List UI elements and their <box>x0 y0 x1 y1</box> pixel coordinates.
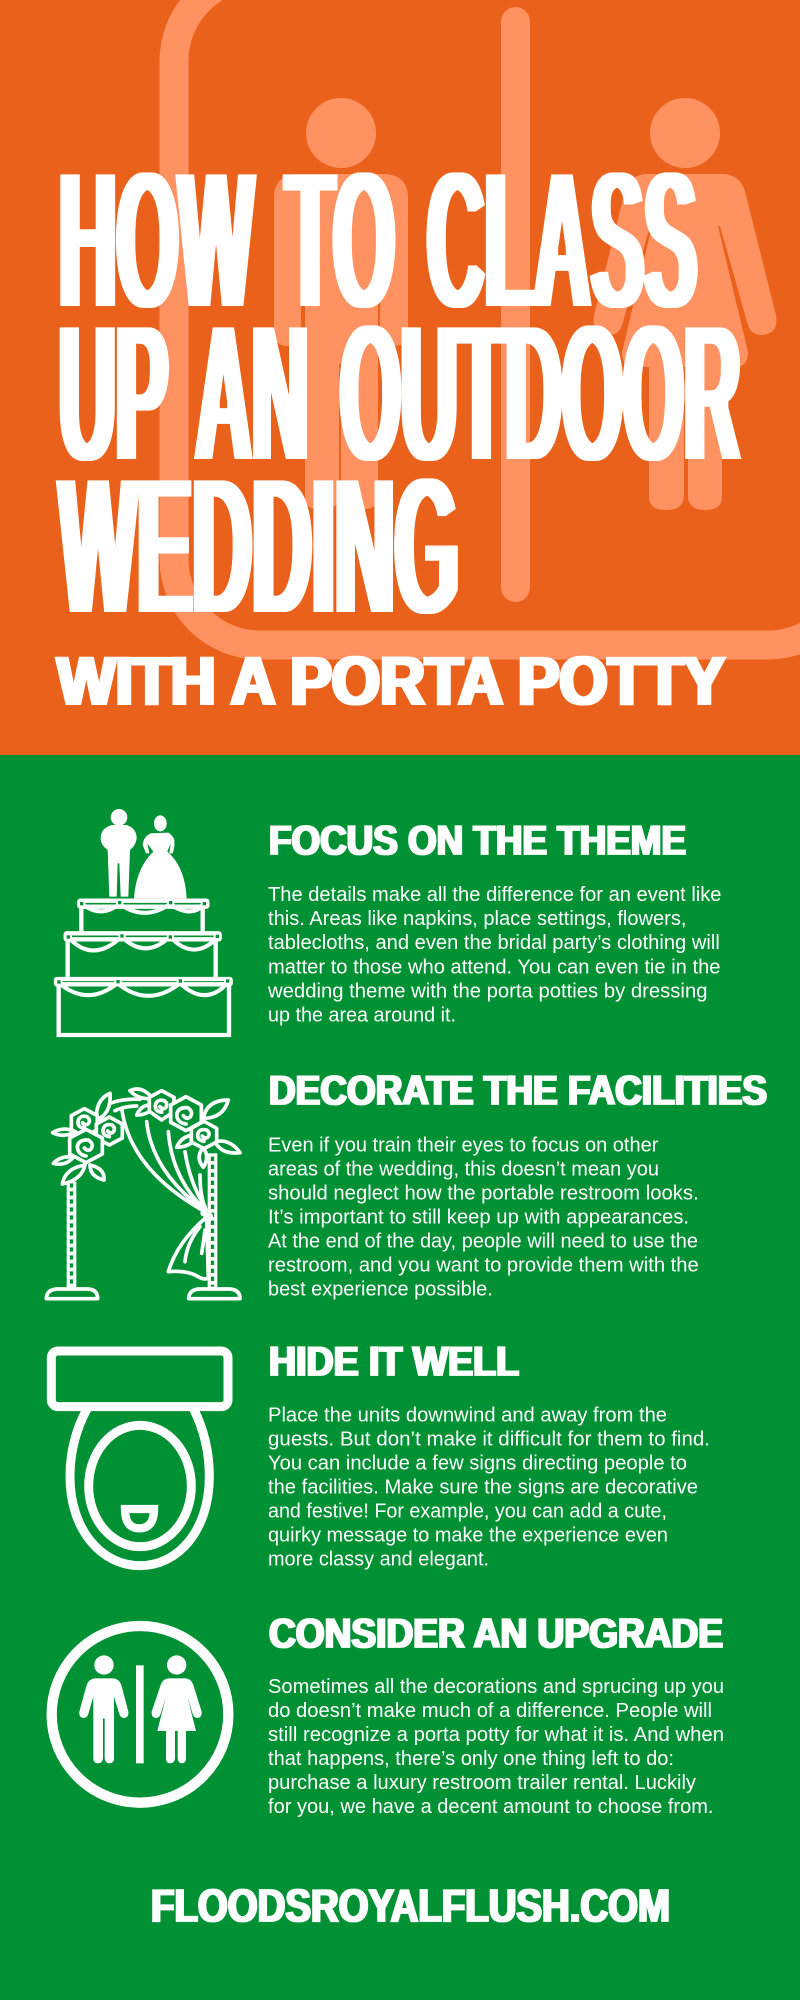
body text <box>268 1134 699 1300</box>
icon: floral wedding arch <box>46 1089 240 1299</box>
body text: wedding theme with the porta potties by dressing <box>267 980 708 1002</box>
body text: areas of the wedding, this doesn’t mean you <box>268 1158 659 1180</box>
icon: restroom sign <box>52 1626 228 1803</box>
heading: HIDE IT WELL <box>269 1338 519 1385</box>
body text: It’s important to still keep up with appearances. <box>268 1206 689 1228</box>
section: hide it well <box>51 1338 710 1570</box>
body text: do doesn’t make much of a difference. People will <box>268 1700 712 1722</box>
body text: purchase a luxury restroom trailer rental. Luckily <box>268 1772 696 1794</box>
panel: green content <box>0 755 800 2000</box>
icon: wedding cake <box>56 809 231 1035</box>
background restroom sign icon <box>174 0 800 645</box>
section: consider an upgrade <box>52 1610 724 1818</box>
body text: Sometimes all the decorations and sprucing up you <box>268 1676 724 1698</box>
body text: more classy and elegant. <box>268 1548 489 1570</box>
body text: matter to those who attend. You can even tie in the <box>268 956 720 978</box>
body text: The details make all the difference for an event like <box>268 884 722 906</box>
body text: restroom, and you want to provide them with the <box>268 1254 699 1276</box>
body text: should neglect how the portable restroom looks. <box>268 1182 699 1204</box>
heading: FOCUS ON THE THEME <box>269 817 686 864</box>
body text: up the area around it. <box>268 1004 456 1026</box>
body text: and festive! For example, you can add a cute, <box>268 1500 667 1522</box>
body text: still recognize a porta potty for what it is. And when <box>268 1724 724 1746</box>
subtitle: WITH A PORTA POTTY <box>57 642 725 720</box>
section: decorate the facilities <box>46 1067 767 1300</box>
heading: CONSIDER AN UPGRADE <box>269 1610 723 1657</box>
body text: At the end of the day, people will need to use the <box>268 1230 698 1252</box>
section: focus on the theme <box>56 809 721 1035</box>
body text: Place the units downwind and away from the <box>268 1404 667 1426</box>
body text: tablecloths, and even the bridal party’s clothing will <box>268 932 720 954</box>
title <box>59 129 740 658</box>
footer website: FLOODSROYALFLUSH.COM <box>151 1880 670 1932</box>
body text: guests. But don’t make it difficult for them to find. <box>268 1428 710 1450</box>
panel: orange header <box>0 0 800 755</box>
body text: best experience possible. <box>268 1278 493 1300</box>
body text: that happens, there’s only one thing left to do: <box>268 1748 674 1770</box>
body text: You can include a few signs directing people to <box>268 1452 687 1474</box>
body text: quirky message to make the experience even <box>268 1524 668 1546</box>
body text <box>268 1404 710 1570</box>
body text: this. Areas like napkins, place settings, flowers, <box>268 908 686 930</box>
body text <box>268 1676 724 1818</box>
body text: Even if you train their eyes to focus on other <box>268 1134 659 1156</box>
body text <box>267 884 722 1026</box>
body text: for you, we have a decent amount to choose from. <box>268 1796 714 1818</box>
body text: the facilities. Make sure the signs are decorative <box>268 1476 698 1498</box>
icon: toilet top view <box>51 1351 228 1566</box>
